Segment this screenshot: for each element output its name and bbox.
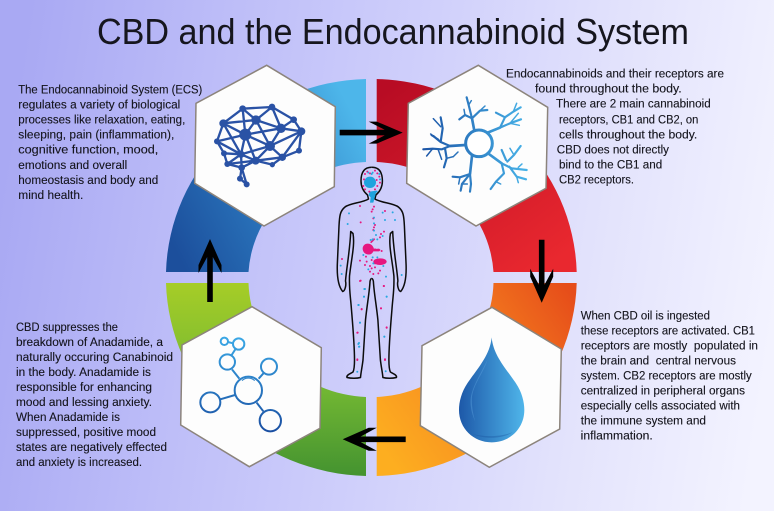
human body figure [337, 167, 406, 378]
icon: oil drop [459, 337, 524, 442]
text block: anadamide: naturally occuring Canabinoid [16, 350, 173, 364]
text block: CBD oil activation: receptors are mostly populated in [581, 338, 758, 352]
text block: anadamide: CBD suppresses the [16, 320, 118, 334]
segment: green [166, 283, 366, 476]
text block: receptors: found throughout the body. [535, 82, 682, 96]
panel: neuron hexagon [407, 65, 548, 226]
arrow: up, left [198, 239, 222, 302]
text block: anadamide: mood and lessing anxiety. [16, 395, 152, 409]
text block: receptors: receptors, CB1 and CB2, on [559, 112, 698, 126]
text block: CBD oil activation [581, 308, 758, 442]
arrow: left, bottom [343, 428, 406, 451]
text block: CBD oil activation: inflammation. [581, 428, 653, 442]
arrow: right, top [340, 122, 403, 144]
hexagon: bottom left [181, 307, 321, 467]
text block: CBD oil activation: especially cells associated with [581, 398, 740, 412]
panel: oil drop hexagon [420, 307, 561, 467]
text block: receptors: Endocannabinoids and their receptors are [506, 67, 724, 81]
text block: anadamide: suppressed, positive mood [16, 425, 156, 439]
text block: endocannabinoid system overview: sleeping, pain (inflammation), [18, 128, 174, 142]
ring: four colored segments [166, 79, 577, 476]
text block: anadamide: states are negatively effected [16, 440, 167, 454]
icon: neuron [423, 97, 527, 192]
text block: anadamide: responsible for enhancing [16, 380, 152, 394]
text block: receptors [506, 67, 724, 186]
text block: CBD oil activation: the immune system and [581, 413, 706, 427]
text block: endocannabinoid system overview: regulates a variety of biological [18, 97, 180, 111]
text block: endocannabinoid system overview: cognitive function, mood, [18, 143, 158, 157]
text block: anadamide: When Anadamide is [16, 410, 120, 424]
text block: endocannabinoid system overview: mind health. [18, 188, 83, 202]
text block: endocannabinoid system overview: homeostasis and body and [18, 173, 158, 187]
text block: endocannabinoid system overview [18, 82, 202, 202]
hexagon: top left [195, 65, 335, 226]
text block: anadamide [16, 320, 173, 469]
text block: anadamide: and anxiety is increased. [16, 455, 142, 469]
text block: receptors: bind to the CB1 and [559, 157, 662, 171]
segment: blue [166, 79, 366, 272]
text block: CBD oil activation: the brain and central nervous [581, 353, 736, 367]
panel: brain hexagon [195, 65, 335, 226]
text block: receptors: There are 2 main cannabinoid [556, 97, 711, 111]
text block: CBD oil activation: centralized in peripheral organs [581, 383, 745, 397]
icon: molecule [200, 338, 281, 431]
arrow: down, right [530, 240, 553, 303]
text block: anadamide: breakdown of Anadamide, a [16, 335, 163, 349]
panel: molecule hexagon [181, 307, 321, 467]
segment: orange [377, 283, 577, 476]
hexagon: bottom right [420, 307, 561, 467]
icon: neural network brain [214, 104, 305, 187]
hexagon: top right [407, 65, 548, 226]
text block: receptors: CB2 receptors. [559, 172, 634, 186]
text block: anadamide: in the body. Anadamide is [16, 365, 151, 379]
text block: receptors: cells throughout the body. [559, 127, 697, 141]
body outline: right half [372, 167, 406, 378]
text block: endocannabinoid system overview: emotions and overall [18, 158, 127, 172]
text block: endocannabinoid system overview: The Endocannabinoid System (ECS) [18, 82, 202, 96]
text block: CBD oil activation: When CBD oil is ingested [581, 308, 710, 322]
leg dots [357, 281, 387, 372]
organs and receptor dots [341, 171, 402, 360]
title: CBD and the Endocannabinoid System [97, 11, 689, 52]
text block: receptors: CBD does not directly [557, 142, 670, 156]
text block: CBD oil activation: these receptors are activated. CB1 [581, 323, 755, 337]
segment: red [377, 79, 577, 272]
text block: CBD oil activation: system. CB2 receptors are mostly [581, 368, 753, 382]
body outline: left half [337, 167, 372, 378]
text block: endocannabinoid system overview: processes like relaxation, eating, [18, 112, 185, 126]
